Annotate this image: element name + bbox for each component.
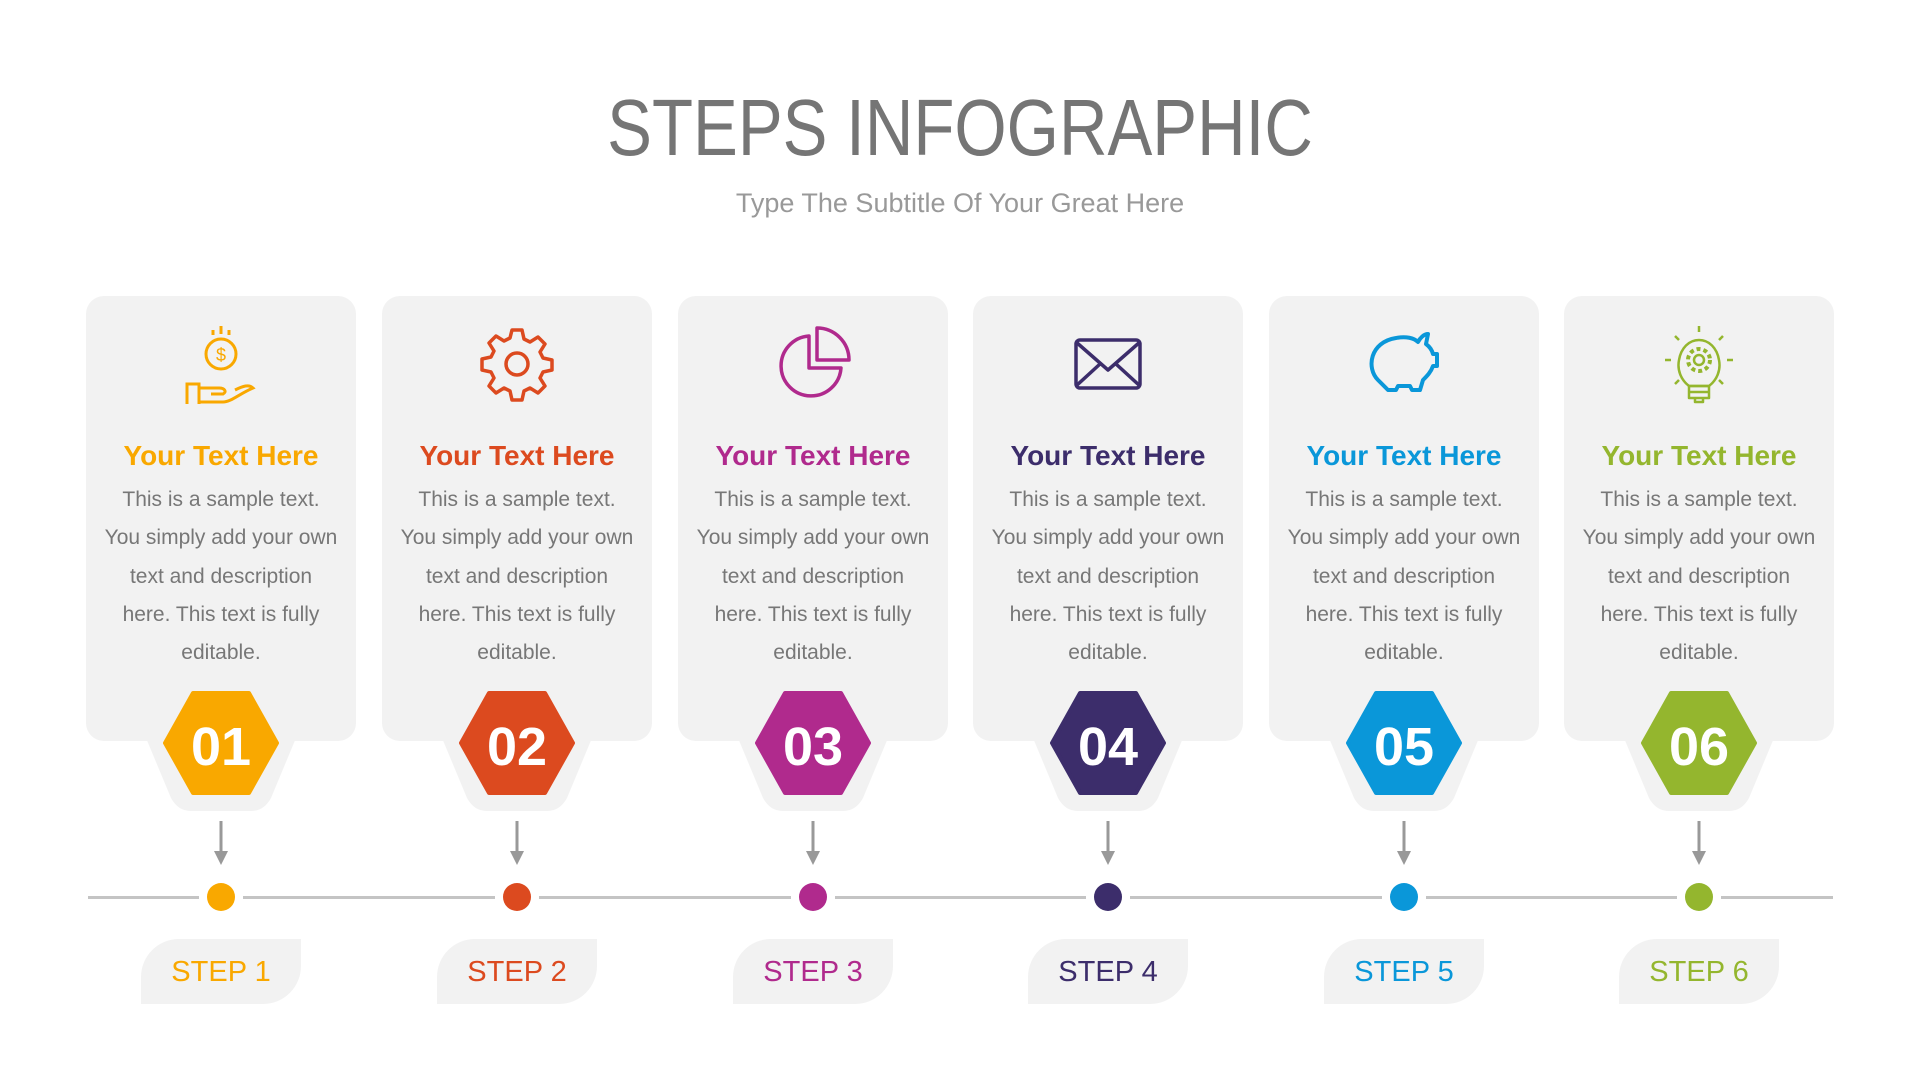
step label xyxy=(1028,939,1188,1004)
text: You simply add your own xyxy=(697,526,929,549)
icon: pie chart xyxy=(779,326,851,398)
step label: STEP 1 xyxy=(171,956,271,988)
text: editable. xyxy=(773,641,853,664)
dot xyxy=(1685,883,1713,911)
step label: STEP 2 xyxy=(467,956,567,988)
text: text and description xyxy=(1608,565,1790,588)
text: text and description xyxy=(1017,565,1199,588)
arrow xyxy=(1692,821,1706,865)
number hexagon: 01 xyxy=(191,717,251,777)
heading: Your Text Here xyxy=(1306,440,1502,471)
panel: step 2 xyxy=(382,296,652,1004)
text: You simply add your own xyxy=(105,526,337,549)
panel: step 1 xyxy=(86,296,356,1004)
text: text and description xyxy=(130,565,312,588)
text: editable. xyxy=(1659,641,1739,664)
step label xyxy=(733,939,893,1004)
number hexagon: 02 xyxy=(487,717,547,777)
panel: step 4 xyxy=(973,296,1243,1004)
icon: money hand: $ xyxy=(216,345,226,365)
text: text and description xyxy=(722,565,904,588)
text: here. This text is fully xyxy=(419,603,615,626)
number hexagon xyxy=(459,691,575,795)
heading: Your Text Here xyxy=(419,440,614,471)
panel: step 6 xyxy=(1564,296,1834,1004)
icon: envelope xyxy=(1074,338,1142,390)
text: here. This text is fully xyxy=(715,603,911,626)
heading: Your Text Here xyxy=(715,440,910,471)
arrow xyxy=(510,821,524,865)
panel: step 3 xyxy=(678,296,948,1004)
text: editable. xyxy=(477,641,557,664)
text: text and description xyxy=(426,565,608,588)
heading: Your Text Here xyxy=(1601,440,1796,471)
step label xyxy=(1619,939,1779,1004)
icon: money hand xyxy=(186,326,256,404)
step label xyxy=(437,939,597,1004)
text: editable. xyxy=(1068,641,1148,664)
number hexagon xyxy=(1346,691,1462,795)
number hexagon xyxy=(1050,691,1166,795)
number hexagon: 05 xyxy=(1374,717,1434,777)
arrow xyxy=(1397,821,1411,865)
text: here. This text is fully xyxy=(1601,603,1797,626)
step label: STEP 6 xyxy=(1649,956,1749,988)
icon: light bulb xyxy=(1665,326,1733,404)
dot xyxy=(1390,883,1418,911)
text xyxy=(401,488,633,664)
number hexagon xyxy=(1641,691,1757,795)
text xyxy=(992,488,1224,664)
number hexagon: 04 xyxy=(1078,717,1138,777)
text: editable. xyxy=(1364,641,1444,664)
text xyxy=(1288,488,1520,664)
arrow xyxy=(1101,821,1115,865)
step label: STEP 3 xyxy=(763,956,863,988)
text: This is a sample text. xyxy=(1009,488,1207,511)
text: This is a sample text. xyxy=(1600,488,1798,511)
text xyxy=(697,488,929,664)
heading: Your Text Here xyxy=(1010,440,1206,471)
dot xyxy=(503,883,531,911)
arrow xyxy=(806,821,820,865)
text: You simply add your own xyxy=(1288,526,1520,549)
text xyxy=(105,488,337,664)
text: editable. xyxy=(181,641,261,664)
subtitle: Type The Subtitle Of Your Great Here xyxy=(736,188,1184,218)
text: This is a sample text. xyxy=(122,488,320,511)
number hexagon xyxy=(163,691,279,795)
arrow xyxy=(214,821,228,865)
text: You simply add your own xyxy=(401,526,633,549)
step label: STEP 5 xyxy=(1354,956,1454,988)
text: here. This text is fully xyxy=(123,603,319,626)
text: You simply add your own xyxy=(1583,526,1815,549)
text: You simply add your own xyxy=(992,526,1224,549)
text: This is a sample text. xyxy=(1305,488,1503,511)
text: here. This text is fully xyxy=(1306,603,1502,626)
number hexagon: 06 xyxy=(1669,717,1729,777)
text: text and description xyxy=(1313,565,1495,588)
number hexagon: 03 xyxy=(783,717,843,777)
text xyxy=(1583,488,1815,664)
heading: Your Text Here xyxy=(123,440,318,471)
panel: step 5 xyxy=(1269,296,1539,1004)
dot xyxy=(799,883,827,911)
text: This is a sample text. xyxy=(418,488,616,511)
step label xyxy=(1324,939,1484,1004)
text: This is a sample text. xyxy=(714,488,912,511)
dot xyxy=(1094,883,1122,911)
icon: piggy bank xyxy=(1370,332,1439,392)
step label xyxy=(141,939,301,1004)
title: STEPS INFOGRAPHIC xyxy=(607,83,1313,172)
dot xyxy=(207,883,235,911)
number hexagon xyxy=(755,691,871,795)
text: here. This text is fully xyxy=(1010,603,1206,626)
icon: gear xyxy=(480,328,554,402)
step label: STEP 4 xyxy=(1058,956,1158,988)
